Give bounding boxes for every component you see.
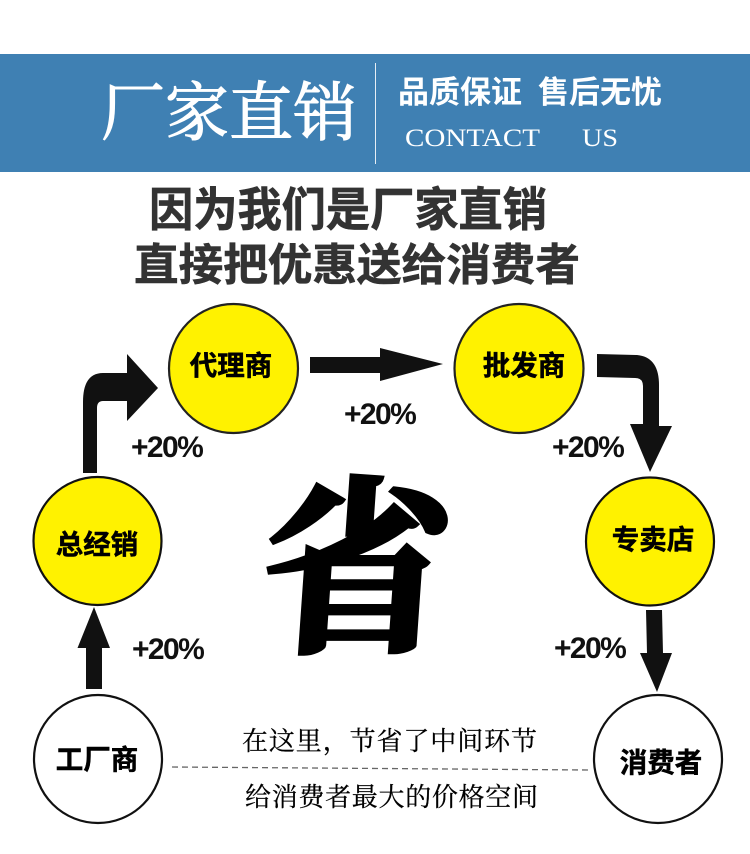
- banner contact text two: US: [582, 125, 618, 152]
- heading line two: 直接把优惠送给消费者: [134, 241, 580, 290]
- banner slogan two: 售后无忧: [538, 75, 662, 110]
- node: specialty store: 专卖店: [612, 524, 694, 555]
- banner slogan: 品质保证: [398, 75, 522, 110]
- arrow: agent to wholesaler: [310, 348, 443, 381]
- label: markup 3: +20%: [552, 431, 624, 464]
- central calligraphy character: 省: [255, 468, 464, 677]
- arrow: wholesaler to specialty store: [597, 354, 672, 472]
- main heading: [134, 184, 580, 290]
- bottom note: first line: 在这里，节省了中间环节: [242, 727, 538, 756]
- node: consumer: [594, 695, 722, 823]
- node: agent: 代理商: [190, 350, 272, 381]
- node: wholesaler: 批发商: [483, 350, 565, 381]
- node: factory: 工厂商: [56, 744, 138, 775]
- label: markup 5: +20%: [554, 632, 626, 665]
- label: markup 1: +20%: [131, 431, 203, 464]
- banner divider: [375, 63, 376, 164]
- arrow: factory to general distributor: [78, 607, 110, 689]
- main heading: 因为我们是厂家直销: [149, 184, 547, 236]
- label: markup 2: +20%: [344, 398, 416, 431]
- header banner: [0, 54, 750, 172]
- banner contact text: CONTACT: [405, 125, 540, 152]
- node: general distributor: [34, 477, 162, 605]
- arrow: general distributor to agent: [83, 354, 158, 473]
- label: markup 4: +20%: [132, 633, 204, 666]
- node: agent: [169, 304, 298, 433]
- banner title: 厂家直销: [101, 78, 357, 149]
- node: wholesaler: [454, 304, 584, 433]
- bottom note: second line: 给消费者最大的价格空间: [245, 783, 539, 812]
- node: specialty store: [586, 478, 714, 606]
- node: factory: [34, 695, 162, 823]
- node: general distributor: 总经销: [56, 529, 138, 560]
- node: consumer: 消费者: [620, 747, 702, 778]
- arrow: specialty store to consumer: [640, 610, 672, 692]
